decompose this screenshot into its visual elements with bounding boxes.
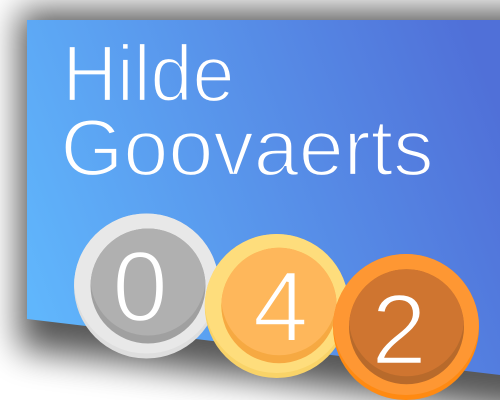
title: Goovaerts — [60, 103, 433, 192]
title — [60, 29, 433, 192]
silver medal: 0: 0 — [112, 231, 168, 343]
bronze medal: 2 — [333, 249, 479, 400]
gold medal: 4: 4 — [253, 251, 308, 363]
gold medal: 4 — [205, 229, 349, 378]
title: Hilde — [62, 29, 234, 118]
silver medal: 0 — [74, 208, 219, 358]
bronze medal: 2: 2 — [371, 274, 427, 386]
